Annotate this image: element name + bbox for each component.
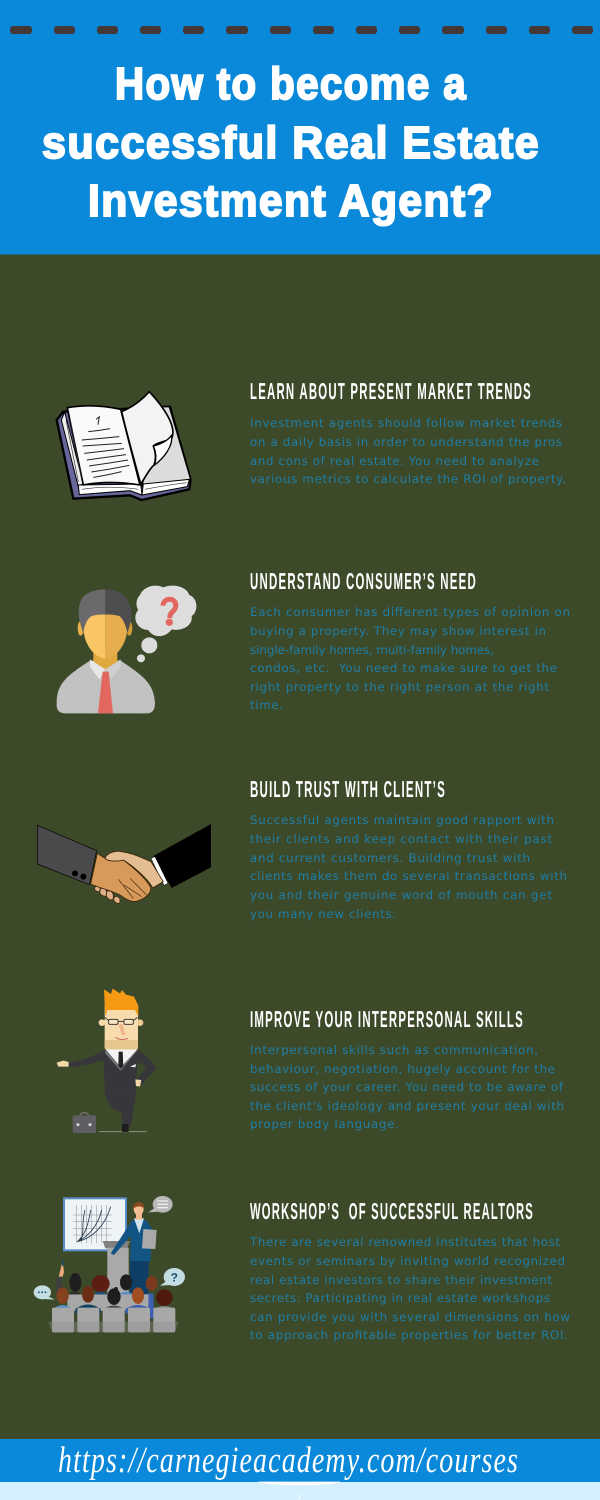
body text: secrets. Participating in real estate workshops — [250, 1291, 550, 1305]
body text: Successful agents maintain good rapport with — [250, 813, 554, 827]
body text: Each consumer has different types of opinion on — [250, 605, 570, 619]
body text: Investment agents should follow market trends — [250, 416, 562, 430]
body text: the client's ideology and present your deal with — [250, 1099, 564, 1113]
body text: their clients and keep contact with their past — [250, 832, 552, 846]
dashed stitch row — [10, 26, 593, 34]
body text: success of your career. You need to be aware of — [250, 1080, 564, 1094]
body text — [250, 605, 570, 712]
icon: thinking man — [57, 586, 196, 713]
body text: buying a property. They may show interest in — [250, 624, 546, 638]
body text: There are several renowned institutes that host — [249, 1235, 560, 1249]
icon: open book — [57, 392, 191, 500]
panel: interpersonal skills — [57, 989, 564, 1133]
title: successful Real Estate — [42, 117, 540, 168]
body text — [250, 416, 566, 486]
title — [42, 58, 540, 226]
body text: single-family homes, multi-family homes, — [250, 643, 494, 657]
main background — [0, 254, 600, 1440]
body text: time. — [250, 698, 283, 712]
body text: and current customers. Building trust with — [250, 851, 530, 865]
body text: Interpersonal skills such as communication, — [250, 1043, 538, 1057]
title: How to become a — [115, 58, 467, 109]
body text: events or seminars by inviting world recognized — [250, 1254, 565, 1268]
body text — [250, 1043, 564, 1131]
header band — [0, 0, 600, 254]
panel: consumer need — [57, 568, 570, 713]
icon: seminar audience — [34, 1196, 185, 1332]
light bottom strip — [0, 1482, 600, 1500]
body text: various metrics to calculate the ROI of property. — [250, 472, 566, 486]
panel: market trends — [57, 378, 566, 500]
panel: workshops — [34, 1196, 570, 1342]
body text: and cons of real estate. You need to analyze — [250, 454, 539, 468]
body text: right property to the right person at the right — [250, 680, 549, 694]
body text: real estate investors to share their investment — [250, 1273, 552, 1287]
panel: build trust — [37, 776, 567, 921]
body text: condos, etc. You need to make sure to get the — [250, 661, 557, 675]
body text: you many new clients. — [250, 907, 396, 921]
body text: clients makes them do several transactions with — [250, 869, 567, 883]
icon: seminar audience: ? — [171, 1271, 178, 1284]
body text — [249, 1235, 570, 1342]
body text: proper body language. — [250, 1117, 399, 1131]
body text: can provide you with several dimensions on how — [250, 1310, 570, 1324]
body text — [250, 813, 567, 921]
body text: you and their genuine word of mouth can get — [250, 888, 552, 902]
body text: on a daily basis in order to understand the pros — [250, 435, 562, 449]
title: Investment Agent? — [88, 175, 494, 226]
icon: handshake — [37, 824, 211, 903]
icon: businessman with briefcase — [57, 989, 157, 1133]
footer band — [0, 1439, 600, 1482]
body text: to approach profitable properties for better ROI. — [250, 1328, 568, 1342]
body text: behaviour, negotiation, hugely account for the — [250, 1062, 555, 1076]
